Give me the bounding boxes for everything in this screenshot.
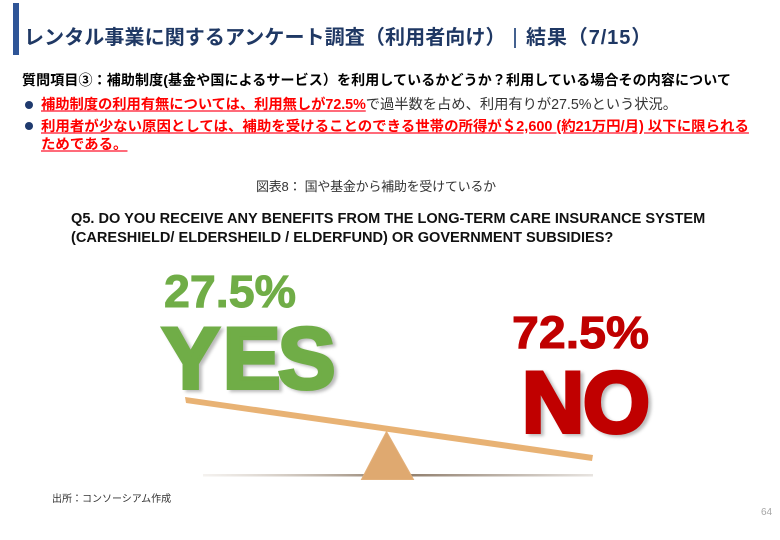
ground shadow xyxy=(203,474,593,476)
bullet 1: 補助制度の利用有無については、利用無しが72.5%で過半数を占め、利用有りが27.5%という状況。 xyxy=(41,97,677,113)
no label: NO xyxy=(525,357,653,453)
title: 結果（7/15） xyxy=(526,27,652,49)
yes percentage: 27.5% xyxy=(164,266,296,317)
survey question: Q5. DO YOU RECEIVE ANY BENEFITS FROM THE LONG-TERM CARE INSURANCE SYSTEM xyxy=(71,211,705,227)
title: レンタル事業に関するアンケート調査（利用者向け） xyxy=(24,27,506,49)
page number: 64 xyxy=(761,507,772,518)
bullet 2 xyxy=(25,118,749,153)
yes label: YES xyxy=(162,311,335,407)
seesaw fulcrum xyxy=(362,432,414,480)
question heading: 質問項目③：補助制度(基金や国によるサービス）を利用しているかどうか？利用している場合その内容について xyxy=(22,72,731,88)
yes label: YES xyxy=(165,313,338,409)
source note: 出所：コンソーシアム作成 xyxy=(52,494,171,505)
survey question xyxy=(71,211,705,246)
seesaw plank xyxy=(185,397,593,461)
no percentage: 72.5% xyxy=(512,307,649,358)
bullet 2: ためである。 xyxy=(41,137,127,153)
figure caption: 図表8： 国や基金から補助を受けているか xyxy=(256,179,496,194)
bullet 2: 利用者が少ない原因としては、補助を受けることのできる世帯の所得が＄2,600 (約21万円/月) 以下に限られる xyxy=(41,119,749,135)
survey question: (CARESHIELD/ ELDERSHEILD / ELDERFUND) OR GOVERNMENT SUBSIDIES? xyxy=(71,230,613,246)
title accent bar xyxy=(13,3,19,55)
no label: NO xyxy=(522,355,650,451)
